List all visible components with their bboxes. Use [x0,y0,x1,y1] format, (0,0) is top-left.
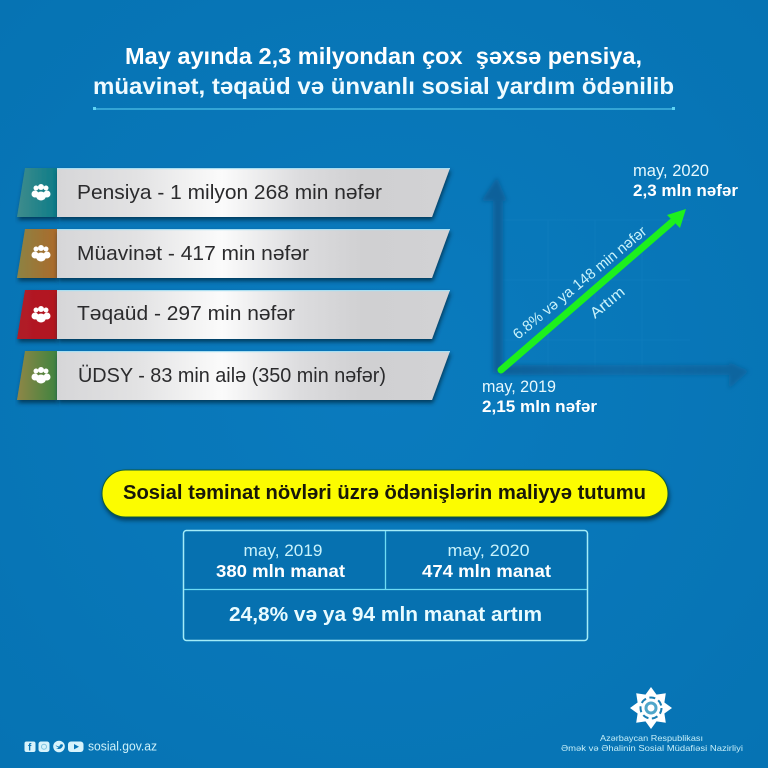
footer: ministry logo [561,687,743,753]
row: Pensiya [17,168,450,217]
cell: may 2019: may, 2019 [244,542,322,560]
cell: may 2019: 380 mln manat [216,561,345,581]
chart: growth arrow [481,162,749,416]
cell: may 2020: 474 mln manat [422,561,551,581]
icon: eight-point star [630,687,672,729]
label: may 2019: 2,15 mln nəfər [482,398,598,416]
heading pill [102,470,668,517]
icon: people [32,245,50,262]
heading pill: Sosial təminat növləri üzrə ödənişlərin maliyyə tutumu [123,481,646,504]
row: Pensiya: Pensiya - 1 milyon 268 min nəfər [77,181,382,204]
label: may 2020: 2,3 mln nəfər [633,182,739,200]
label: may 2020: may, 2020 [633,162,709,180]
row: ÜDSY: ÜDSY - 83 min ailə (350 min nəfər) [78,364,386,387]
icon: facebook: f [28,742,32,754]
row: Müavinət [17,229,450,278]
ministry name: Əmək və Əhalinin Sosial Müdafiəsi Nazirliyi [561,743,743,753]
row: Təqaüd: Təqaüd - 297 min nəfər [77,302,295,325]
label: may 2019: may, 2019 [482,378,556,396]
label: may 2020 [633,162,739,200]
cell: may 2020 [422,542,551,581]
icon: youtube [68,742,84,752]
label: may 2019 [482,378,598,416]
title: müavinət, təqaüd və ünvanlı sosial yardım ödənilib [93,73,674,99]
title: May ayında 2,3 milyondan çox şəxsə pensiya, [125,43,642,69]
table: financial volume [184,530,588,640]
cell: total increase: 24,8% və ya 94 mln manat artım [229,604,542,626]
ministry name [561,733,743,753]
website: sosial.gov.az [88,740,157,754]
icon: people [32,184,50,200]
cell: may 2019 [216,542,345,581]
cell: may 2020: may, 2020 [448,542,530,560]
footer: social links [24,740,157,754]
arrow: increase [501,209,686,370]
axes [481,177,749,389]
row: Təqaüd [17,290,450,339]
grid lines [500,220,690,370]
icon: people [32,306,50,322]
title underline [93,107,675,110]
icon: people [32,367,50,384]
ministry name: Azərbaycan Respublikası [600,733,703,743]
row: ÜDSY [17,351,450,400]
row: Müavinət: Müavinət - 417 min nəfər [77,242,309,265]
title [93,43,674,99]
rotated label: Artım: Artım [587,284,628,322]
rotated label: percent growth: 6.8% və ya 148 min nəfər [510,223,650,343]
icon: instagram [38,742,50,752]
panel: beneficiary categories [17,168,450,400]
icon: twitter [53,741,65,752]
